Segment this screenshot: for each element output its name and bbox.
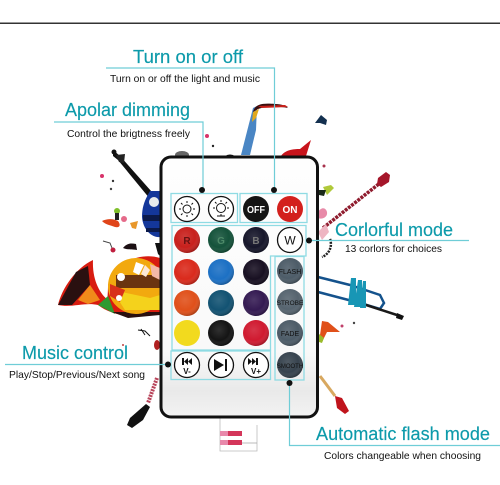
callout: turn on or off: Turn on or off the light and music	[110, 73, 260, 85]
colour buttons: G	[217, 236, 225, 247]
icon: trumpet	[318, 277, 404, 343]
callout: colorful mode: 13 corlors for choices	[345, 243, 442, 255]
icon: cable connector	[220, 418, 257, 451]
white button	[278, 228, 302, 252]
remote body	[161, 157, 318, 417]
callout: music control: Play/Stop/Previous/Next song	[9, 369, 145, 381]
callout: automatic flash mode	[286, 380, 500, 462]
off button: OFF	[247, 205, 265, 216]
icon: french horn	[58, 256, 164, 318]
callout: music control	[5, 343, 171, 381]
callout: apolar dimming	[54, 100, 205, 193]
music buttons: V+	[251, 367, 261, 376]
icon: top instruments	[175, 104, 327, 159]
mode buttons: FADE	[281, 331, 299, 338]
music buttons	[174, 352, 268, 378]
button group outlines	[171, 194, 307, 380]
colour buttons: B	[252, 236, 260, 247]
mode buttons: STROBE	[277, 300, 304, 307]
icon: butterflies and splashes left	[100, 134, 214, 252]
on button: ON	[282, 205, 298, 216]
white button: W	[284, 234, 296, 248]
callout: automatic flash mode: Colors changeable when choosing	[324, 450, 481, 462]
callout: colorful mode	[306, 220, 469, 255]
callout: music control: Music control	[22, 343, 128, 363]
callout: colorful mode: Corlorful mode	[335, 220, 453, 240]
icon: banjo	[318, 164, 390, 257]
off button	[243, 196, 269, 222]
icon: lower guitar necks	[122, 329, 349, 428]
callout: apolar dimming: Apolar dimming	[65, 100, 190, 120]
music buttons: V-	[183, 367, 191, 376]
on button	[277, 196, 303, 222]
colour buttons	[174, 227, 269, 346]
top rule	[0, 22, 500, 24]
mode buttons	[277, 258, 304, 378]
icon: blue guitar	[112, 150, 160, 256]
callout: turn on or off: Turn on or off	[133, 47, 244, 67]
callout: apolar dimming: Control the brigtness freely	[67, 128, 191, 140]
colour buttons: R	[183, 236, 191, 247]
mode buttons: SMOOTH	[277, 364, 303, 370]
dimming buttons	[174, 196, 234, 222]
callout: turn on or off	[106, 47, 277, 193]
illustration: musical instruments	[58, 104, 404, 451]
callout: automatic flash mode: Automatic flash mode	[316, 424, 490, 444]
mode buttons: FLASH	[279, 269, 301, 276]
remote control	[161, 157, 318, 417]
